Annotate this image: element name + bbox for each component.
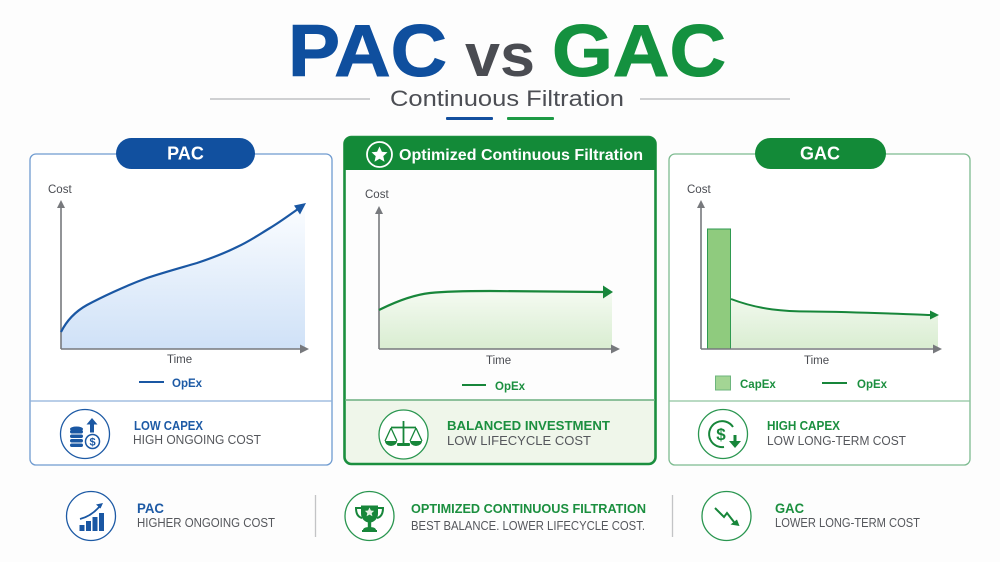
summary: GAC: [702, 492, 920, 540]
Optimized chart: Time: [486, 355, 511, 367]
GAC chart: Time: [804, 355, 829, 367]
icon: falling line: [702, 492, 751, 540]
summary: Optimized: [345, 492, 646, 540]
Optimized header: [344, 137, 656, 170]
icon: trophy: [345, 492, 394, 540]
GAC summary text: LOWER LONG-TERM COST: [775, 516, 920, 530]
panel: GAC: [669, 138, 970, 465]
Optimized callout text: [447, 418, 610, 448]
Optimized legend: OpEx: [495, 381, 526, 393]
icon: balance scale: [379, 410, 428, 459]
Optimized summary text: [411, 502, 646, 533]
subtitle: [210, 86, 790, 120]
Optimized callout text: BALANCED INVESTMENT: [447, 418, 610, 433]
PAC legend: [139, 378, 203, 390]
GAC summary text: GAC: [775, 501, 804, 516]
Optimized summary text: BEST BALANCE. LOWER LIFECYCLE COST.: [411, 519, 645, 533]
GAC chart: Cost: [687, 184, 711, 196]
PAC chart: [48, 184, 309, 366]
panel: PAC: [30, 138, 332, 465]
PAC chart: Cost: [48, 184, 72, 196]
GAC legend: CapEx: [740, 379, 776, 391]
subtitle: Continuous Filtration: [390, 86, 624, 111]
title: vs: [465, 22, 535, 89]
icon: rising bars: [66, 492, 116, 540]
GAC summary text: [775, 501, 920, 530]
GAC callout text: [767, 419, 906, 448]
panel: Optimized: [344, 137, 656, 464]
Optimized summary text: OPTIMIZED CONTINUOUS FILTRATION: [411, 502, 646, 516]
summary: PAC: [66, 492, 275, 540]
PAC badge: [116, 138, 255, 169]
PAC legend: OpEx: [172, 378, 203, 390]
PAC callout text: LOW CAPEX: [134, 419, 204, 433]
icon: dollar down: $: [716, 425, 726, 444]
title: [288, 11, 726, 92]
icon: coins and dollar: $: [89, 436, 96, 448]
GAC chart: [687, 184, 942, 367]
PAC badge: PAC: [167, 144, 204, 164]
Optimized chart: [365, 189, 620, 367]
Optimized legend: [462, 381, 526, 393]
Optimized header: Optimized Continuous Filtration: [399, 147, 643, 164]
PAC chart: Time: [167, 354, 192, 366]
PAC callout text: [133, 419, 261, 447]
GAC badge: GAC: [800, 144, 840, 164]
Optimized chart: Cost: [365, 189, 389, 201]
Optimized callout text: LOW LIFECYCLE COST: [447, 433, 591, 448]
title: PAC: [288, 11, 447, 92]
icon: coins and dollar: [60, 410, 110, 458]
GAC legend: [716, 376, 888, 391]
title: GAC: [552, 11, 726, 92]
PAC summary text: [137, 501, 275, 530]
PAC summary text: HIGHER ONGOING COST: [137, 516, 275, 530]
PAC callout text: HIGH ONGOING COST: [133, 433, 261, 447]
GAC legend: OpEx: [857, 379, 888, 391]
GAC badge: [755, 138, 886, 169]
GAC callout text: HIGH CAPEX: [767, 419, 841, 433]
GAC callout text: LOW LONG-TERM COST: [767, 434, 906, 448]
icon: dollar down: [698, 410, 748, 458]
PAC summary text: PAC: [137, 501, 164, 516]
